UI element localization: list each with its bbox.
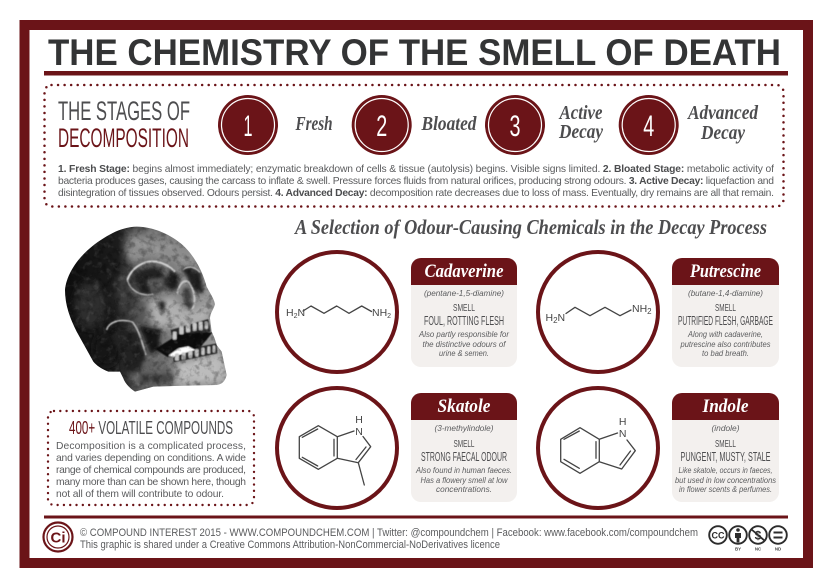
stage 1 label: Fresh <box>295 113 332 135</box>
stages description text: bacteria produces gases, causing the carcass to inflate & swell. Pressure forces fluids from natural orifices, producing strong odours. 3. Active Decay: liquefaction and <box>58 176 774 187</box>
putrescine structure: 2 <box>647 307 652 316</box>
tooth shadow band <box>170 318 212 338</box>
stages description text: disintegration of tissues observed. Odours persist. 4. Advanced Decay: decomposition rate decreases due to loss of mass. Eventually, dry remains are all that remain. <box>58 188 774 199</box>
stage 4 label: Decay <box>700 122 745 144</box>
cadaverine structure: NH <box>372 307 387 319</box>
card: cadaverine: urine & semen. <box>439 349 489 358</box>
footer credits <box>80 527 698 551</box>
icon: no derivatives: ND <box>775 546 781 552</box>
skull illustration <box>63 225 228 393</box>
cadaverine structure: 2 <box>387 313 391 320</box>
stage 4 label: Advanced <box>686 102 759 124</box>
indole structure: H <box>619 416 626 428</box>
card: skatole: Has a flowery smell at low <box>420 476 509 485</box>
stage 2 badge <box>352 95 412 155</box>
skatole structure <box>299 414 371 485</box>
card: putrescine: to bad breath. <box>702 349 749 358</box>
card: cadaverine: FOUL, ROTTING FLESH <box>424 313 504 328</box>
stage 3 badge: 3 <box>510 110 520 143</box>
icon: non-commercial <box>749 526 767 552</box>
stage 3 label: Active <box>558 102 603 124</box>
putrescine structure: N <box>558 312 565 324</box>
title rule <box>44 71 788 76</box>
card: indole: SMELL <box>715 438 736 450</box>
heading: the stages of decomposition: DECOMPOSITION <box>58 123 189 153</box>
cadaverine structure: H <box>286 307 294 319</box>
volatile compounds description <box>56 441 246 500</box>
card: skatole: (3-methylindole) <box>434 423 494 433</box>
icons: creative commons licence <box>709 526 787 552</box>
card: skatole: Also found in human faeces. <box>415 466 512 475</box>
card: indole: in flower scents & perfumes. <box>679 485 772 494</box>
cadaverine structure <box>286 306 391 320</box>
putrescine structure: 2 <box>553 316 558 325</box>
card: indole: Like skatole, occurs in faeces, <box>678 466 772 475</box>
card: skatole: SMELL <box>454 438 475 450</box>
icon: attribution: BY <box>735 546 741 552</box>
card: putrescine: Along with cadaverine, <box>687 330 763 339</box>
card: putrescine: putrescine also contributes <box>680 340 770 349</box>
molecule: cadaverine <box>277 252 397 372</box>
card: skatole <box>411 393 517 502</box>
footer credits: © COMPOUND INTEREST 2015 - WWW.COMPOUNDCHEM.COM | Twitter: @compoundchem | Facebook: www.facebook.com/compoundchem <box>80 527 698 539</box>
card: cadaverine: Cadaverine <box>424 261 504 282</box>
title: THE CHEMISTRY OF THE SMELL OF DEATH <box>48 31 781 73</box>
stage 3 label: Decay <box>558 121 603 143</box>
card: indole: but used in low concentrations <box>675 476 776 485</box>
card: indole <box>672 393 779 502</box>
stage 2 label: Bloated <box>421 113 477 135</box>
stage 4 badge <box>619 95 679 155</box>
card: skatole: Skatole <box>438 396 491 417</box>
logo: compound interest: Ci <box>50 530 66 546</box>
section heading: odour-causing chemicals: A Selection of Odour-Causing Chemicals in the Decay Process <box>293 215 767 239</box>
cadaverine structure: 2 <box>294 313 298 320</box>
volatile compounds description: not all of them will contribute to odour. <box>56 489 224 500</box>
molecule: putrescine <box>538 252 658 372</box>
stages description text: 1. Fresh Stage: begins almost immediately; enzymatic breakdown of cells & tissue (autolysis) begins. Visible signs limited. 2. Bloated Stage: metabolic activity of <box>58 164 774 175</box>
molecule: indole <box>538 388 658 508</box>
card: indole: (indole) <box>712 423 740 433</box>
volatile compounds description: many more than can be shown here, though <box>56 477 246 488</box>
volatile compounds description: and varies depending on conditions. A wide <box>56 453 246 464</box>
stage 4 badge: 4 <box>643 110 654 143</box>
panel: stages of decomposition <box>44 85 784 206</box>
card: indole: Indole <box>702 396 749 417</box>
card: cadaverine: (pentane-1,5-diamine) <box>424 288 504 298</box>
skatole structure: N <box>355 426 363 438</box>
card: putrescine: SMELL <box>715 302 736 314</box>
heading: the stages of decomposition: THE STAGES OF <box>58 96 190 126</box>
card: putrescine: (butane-1,4-diamine) <box>688 288 763 298</box>
volatile compounds description: range of chemical compounds are produced, <box>56 465 246 476</box>
stages description text <box>58 164 774 199</box>
stage 1 badge: 1 <box>244 110 252 143</box>
card: putrescine: Putrescine <box>689 261 761 282</box>
icon: non-commercial: NC <box>755 546 762 552</box>
card: cadaverine: Also partly responsible for <box>418 330 509 339</box>
card: putrescine <box>672 258 779 367</box>
indole structure: N <box>619 428 626 440</box>
icon: non-commercial: $ <box>755 528 762 542</box>
heading: 400+ volatile compounds: 400+ VOLATILE COMPOUNDS <box>69 418 233 438</box>
card: cadaverine: SMELL <box>453 302 475 314</box>
upper teeth <box>173 322 208 340</box>
icon: cc: CC <box>712 530 725 540</box>
heading: the stages of decomposition <box>58 96 190 153</box>
panel: 400+ volatile compounds <box>48 411 254 505</box>
indole structure <box>561 416 635 473</box>
card: skatole: concentrations. <box>436 485 492 494</box>
card: cadaverine <box>411 258 517 367</box>
footer rule <box>44 516 788 518</box>
cadaverine structure: N <box>298 307 305 319</box>
lower teeth <box>175 345 215 361</box>
putrescine structure: NH <box>632 303 647 315</box>
stage 2 badge: 2 <box>376 110 387 143</box>
stage 4 label <box>686 102 759 144</box>
stage 1 badge <box>218 95 278 155</box>
molecule: skatole <box>277 388 397 508</box>
card: skatole: STRONG FAECAL ODOUR <box>421 449 507 464</box>
skatole structure: H <box>355 414 363 426</box>
stage 3 label <box>558 102 603 143</box>
card: cadaverine: the distinctive odours of <box>422 340 506 349</box>
stage 3 badge <box>485 95 545 155</box>
volatile compounds description: Decomposition is a complicated process, <box>56 441 246 452</box>
footer credits: This graphic is shared under a Creative Commons Attribution-NonCommercial-NoDerivatives licence <box>80 539 500 551</box>
logo: compound interest <box>44 522 72 552</box>
putrescine structure: H <box>546 312 553 324</box>
putrescine structure <box>546 303 652 325</box>
